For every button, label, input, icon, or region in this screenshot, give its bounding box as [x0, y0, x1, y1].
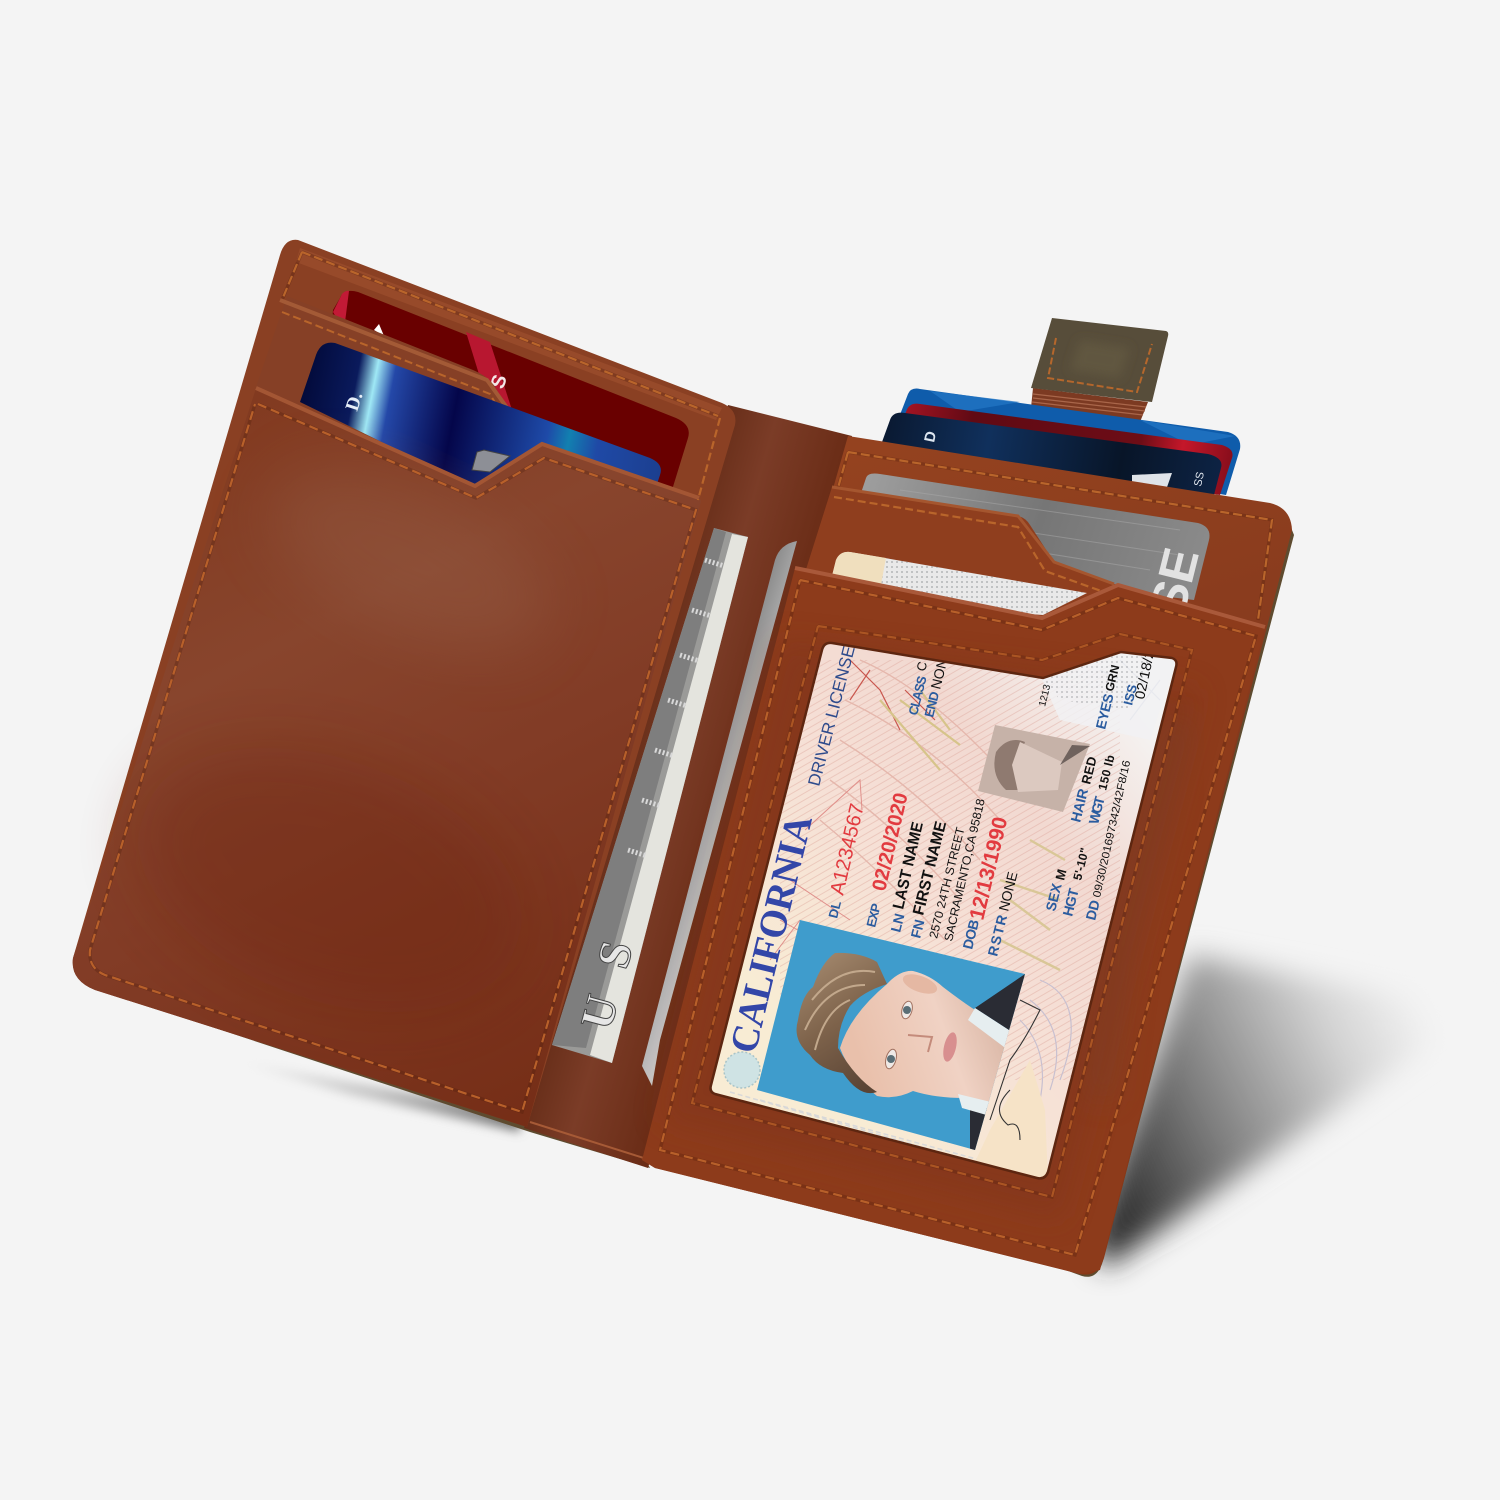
- front pocket stitching: [90, 404, 696, 1112]
- card letter D: D: [921, 430, 940, 444]
- DL number: 2570 24TH STREET: [926, 825, 968, 940]
- ID guilloche pattern: [730, 660, 1160, 1165]
- DL number: GRN: [1102, 663, 1122, 693]
- DL number: EXP: [863, 901, 884, 929]
- DL number: SEX: [1042, 881, 1065, 913]
- wallet back edge: [100, 525, 1294, 1277]
- second pocket stitching: [834, 497, 1104, 592]
- DL number: HAIR: [1067, 787, 1091, 824]
- DL number: NONE: [995, 870, 1021, 913]
- cast shadow right: [1090, 955, 1480, 1268]
- DL number: RED: [1078, 755, 1100, 786]
- bill: US: [570, 907, 650, 1035]
- red card: [890, 404, 1233, 495]
- DL number: WGT: [1085, 794, 1108, 826]
- DL number: LAST NAME: [890, 820, 927, 911]
- DL number: NONE: [927, 648, 953, 691]
- DL number: RSTR: [984, 913, 1010, 958]
- red card letter S: S: [487, 372, 512, 392]
- DL number: EYES: [1092, 692, 1117, 731]
- ID seal: [724, 1052, 760, 1088]
- front pocket left: [73, 388, 701, 1127]
- second id card: [825, 552, 1087, 615]
- right panel: [642, 436, 1292, 1275]
- wallet product illustration: [72, 240, 1410, 1284]
- mouth: [943, 1032, 957, 1062]
- red card letter A: [374, 324, 384, 336]
- second pocket left: [255, 296, 518, 440]
- ID dotted white corner: [1042, 660, 1160, 732]
- DL number: DD: [1082, 898, 1103, 922]
- tab strap: [1031, 388, 1148, 422]
- DL number: SACRAMENTO,CA 95818: [941, 797, 988, 943]
- left panel base: [73, 240, 735, 1127]
- blue card in left panel: [300, 343, 661, 490]
- ID signature area: [975, 1060, 1048, 1180]
- photo backdrop: [757, 920, 1025, 1150]
- card chip: [472, 450, 510, 472]
- signature: [990, 1000, 1040, 1140]
- ID window: [700, 630, 1190, 1190]
- hair: [796, 953, 887, 1093]
- DL number: M: [1052, 868, 1070, 882]
- metal card: [860, 474, 1210, 621]
- DL number: 09/30/201697342/42F8/16: [1091, 759, 1133, 899]
- DL number: [825, 648, 1157, 958]
- left panel: [73, 240, 735, 1127]
- DL number: 02/18/2: [1131, 648, 1157, 701]
- top left stitching: [282, 252, 718, 416]
- DL number: CLASS: [905, 674, 930, 717]
- DL number: 150 lb: [1095, 753, 1118, 792]
- DL number: FN: [907, 918, 927, 940]
- cast shadow left: [230, 1060, 520, 1132]
- pull tab: [1031, 318, 1168, 422]
- DL number: END: [921, 690, 942, 719]
- ear: [903, 974, 937, 994]
- ID card background: [712, 644, 1176, 1169]
- DL number: FIRST NAME: [910, 819, 950, 917]
- ID photo: [757, 920, 1025, 1150]
- shirt collar: [958, 1008, 1009, 1114]
- state name: CALIFORNIA: [722, 811, 821, 1057]
- blue card: [890, 389, 1240, 495]
- jacket: [970, 974, 1025, 1150]
- right panel base: [642, 436, 1292, 1275]
- window edge: [710, 643, 1176, 1178]
- eyes: [901, 1000, 913, 1020]
- window stitching: [692, 626, 1192, 1197]
- card letters SS: SS: [1192, 471, 1207, 488]
- ghost photo: [978, 725, 1090, 812]
- license title: DRIVER LICENSE: [804, 644, 859, 788]
- bill: [552, 528, 748, 1063]
- red card in left panel: [330, 291, 689, 490]
- slot: [642, 541, 797, 1086]
- DL number: 1213: [1037, 683, 1053, 708]
- DL number: 12/13/1990: [965, 815, 1012, 922]
- neck and face: [840, 971, 1012, 1103]
- second pocket right: [790, 487, 1120, 660]
- DL number: 5'-10": [1070, 846, 1092, 882]
- metal card letters: SE: [1139, 542, 1210, 621]
- DL number: A1234567: [826, 802, 869, 897]
- DL number: 02/20/2020: [868, 791, 913, 893]
- card letter A: [1132, 473, 1172, 490]
- tab leather: [1031, 318, 1168, 402]
- navy card: [880, 413, 1221, 495]
- front pocket stitching: [660, 580, 1256, 1255]
- DL number: LN: [887, 912, 907, 934]
- center gusset: [524, 405, 852, 1168]
- right panel stitching: [818, 452, 1272, 620]
- back cards: [880, 389, 1240, 495]
- DL number: ISS: [1120, 682, 1140, 707]
- DL number: DOB: [959, 918, 982, 951]
- gusset seam: [530, 1122, 650, 1160]
- DL number: HGT: [1059, 886, 1082, 918]
- DL number: C: [913, 660, 930, 673]
- nose: [908, 1035, 932, 1052]
- DL number: DL: [825, 899, 844, 920]
- front pocket right: [642, 568, 1265, 1274]
- card text D.: D.: [342, 389, 367, 414]
